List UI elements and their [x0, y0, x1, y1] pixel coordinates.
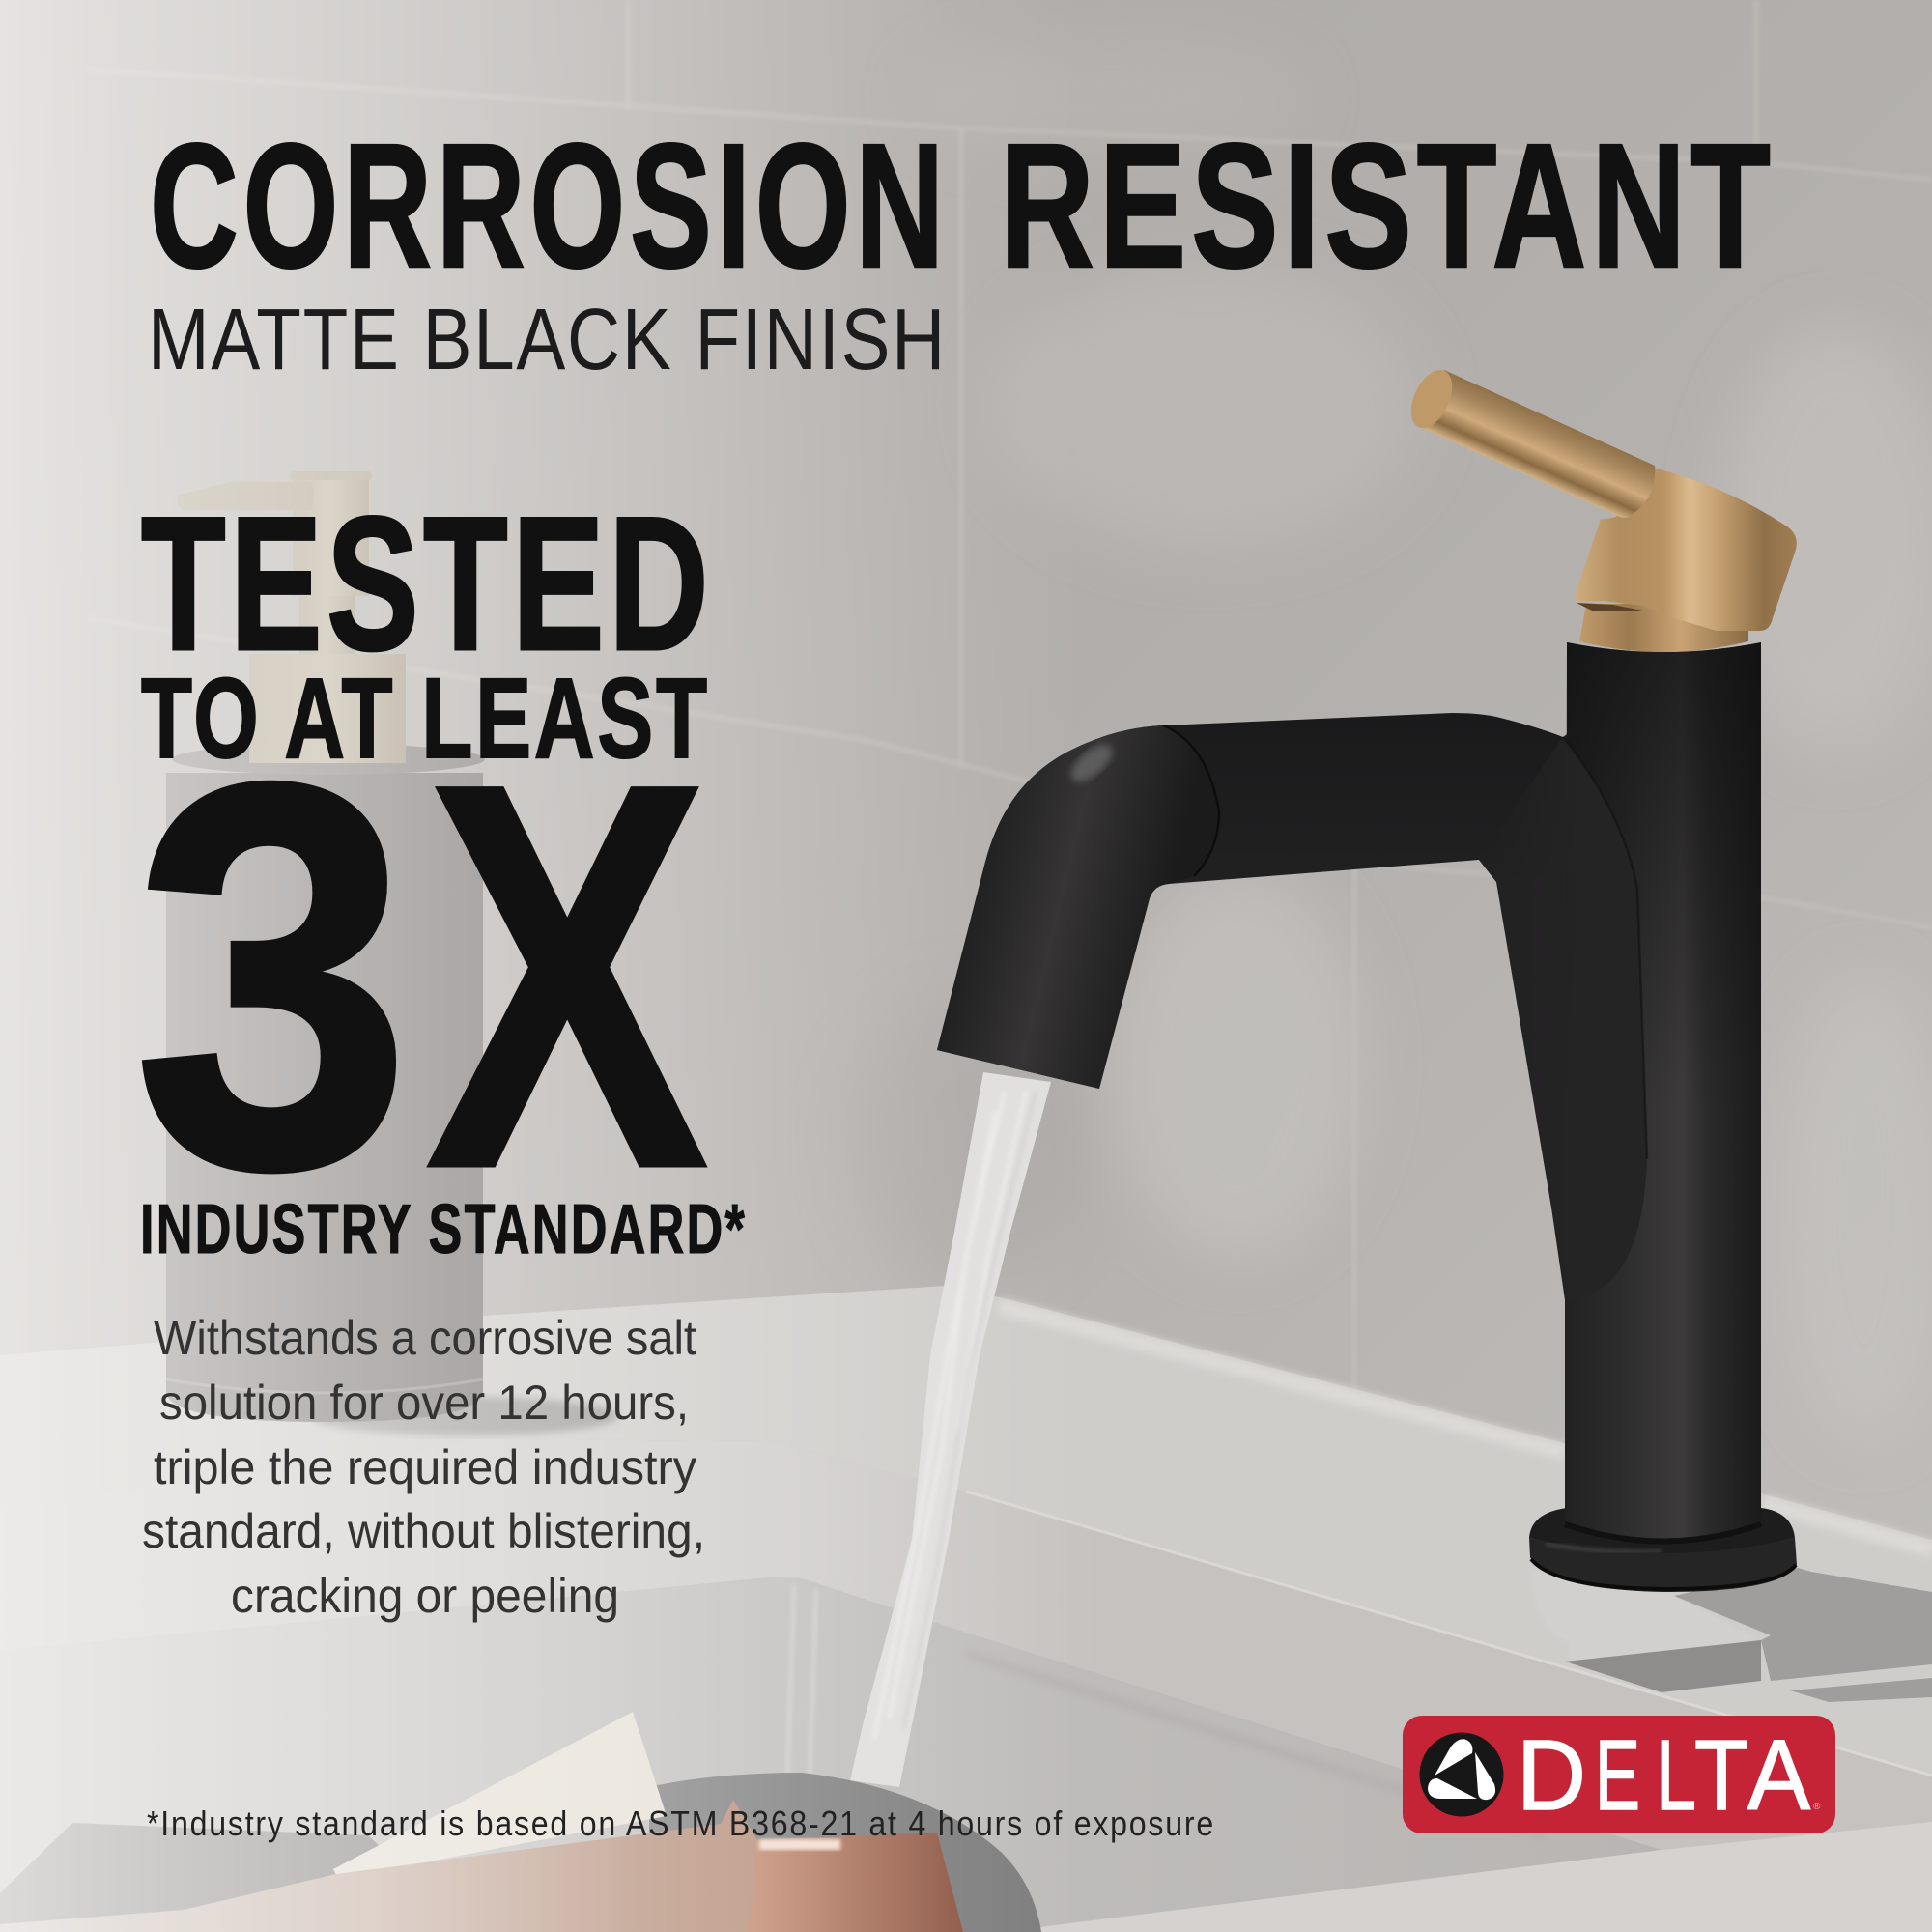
countertop back and top surface: [0, 1286, 1932, 1776]
faucet shadows on counter: [1565, 1568, 1932, 1702]
big statistic: [133, 477, 747, 1281]
logo wordmark: L: [1656, 1719, 1696, 1831]
body text: triple the required industry: [154, 1440, 696, 1494]
counter front face: [0, 1439, 1932, 1850]
Delta logo: [1403, 1716, 1835, 1833]
logo wordmark: E: [1595, 1719, 1640, 1831]
sink basin: [0, 1577, 1662, 1932]
subheading: MATTE BLACK FINISH: [148, 292, 947, 388]
logo wordmark: [1517, 1719, 1810, 1831]
soap dispenser: [166, 471, 618, 1435]
body text: standard, without blistering,: [142, 1504, 705, 1558]
logo wordmark: T: [1694, 1719, 1748, 1831]
handle stem: [1579, 604, 1748, 652]
water stream: [850, 1072, 1051, 1787]
faucet body: [1479, 642, 1761, 1538]
faucet: [937, 363, 1797, 1592]
logo wordmark: A: [1747, 1719, 1810, 1831]
lower right counter surface: [1024, 1822, 1932, 1932]
body text: Withstands a corrosive salt: [154, 1311, 696, 1365]
body text: cracking or peeling: [231, 1569, 619, 1623]
handle hub: [1575, 468, 1797, 631]
footnote: *Industry standard is based on ASTM B368-21 at 4 hours of exposure: [147, 1804, 1215, 1843]
big statistic: 3: [133, 670, 412, 1281]
logo red background: [1403, 1716, 1835, 1833]
big statistic: TESTED: [141, 477, 713, 690]
big statistic: TO AT LEAST: [141, 655, 710, 782]
headline: CORROSION: [150, 106, 949, 304]
registered mark: ®: [1813, 1802, 1821, 1812]
big statistic: INDUSTRY STANDARD*: [140, 1191, 747, 1268]
spout highlight: [1065, 738, 1119, 788]
handle lever: [1403, 363, 1655, 518]
faucet base: [1529, 1508, 1797, 1592]
logo emblem: [1420, 1733, 1503, 1816]
big statistic: X: [426, 670, 710, 1281]
logo wordmark: D: [1517, 1719, 1586, 1831]
faucet neck flange: [1479, 737, 1647, 1300]
body text: solution for over 12 hours,: [159, 1376, 689, 1430]
spout: [937, 713, 1584, 1089]
bathroom items in foreground: [0, 1712, 1041, 1932]
tile grout lines: [87, 0, 1932, 1391]
body text: [142, 1311, 705, 1623]
base reflection on counter: [1530, 1570, 1761, 1663]
